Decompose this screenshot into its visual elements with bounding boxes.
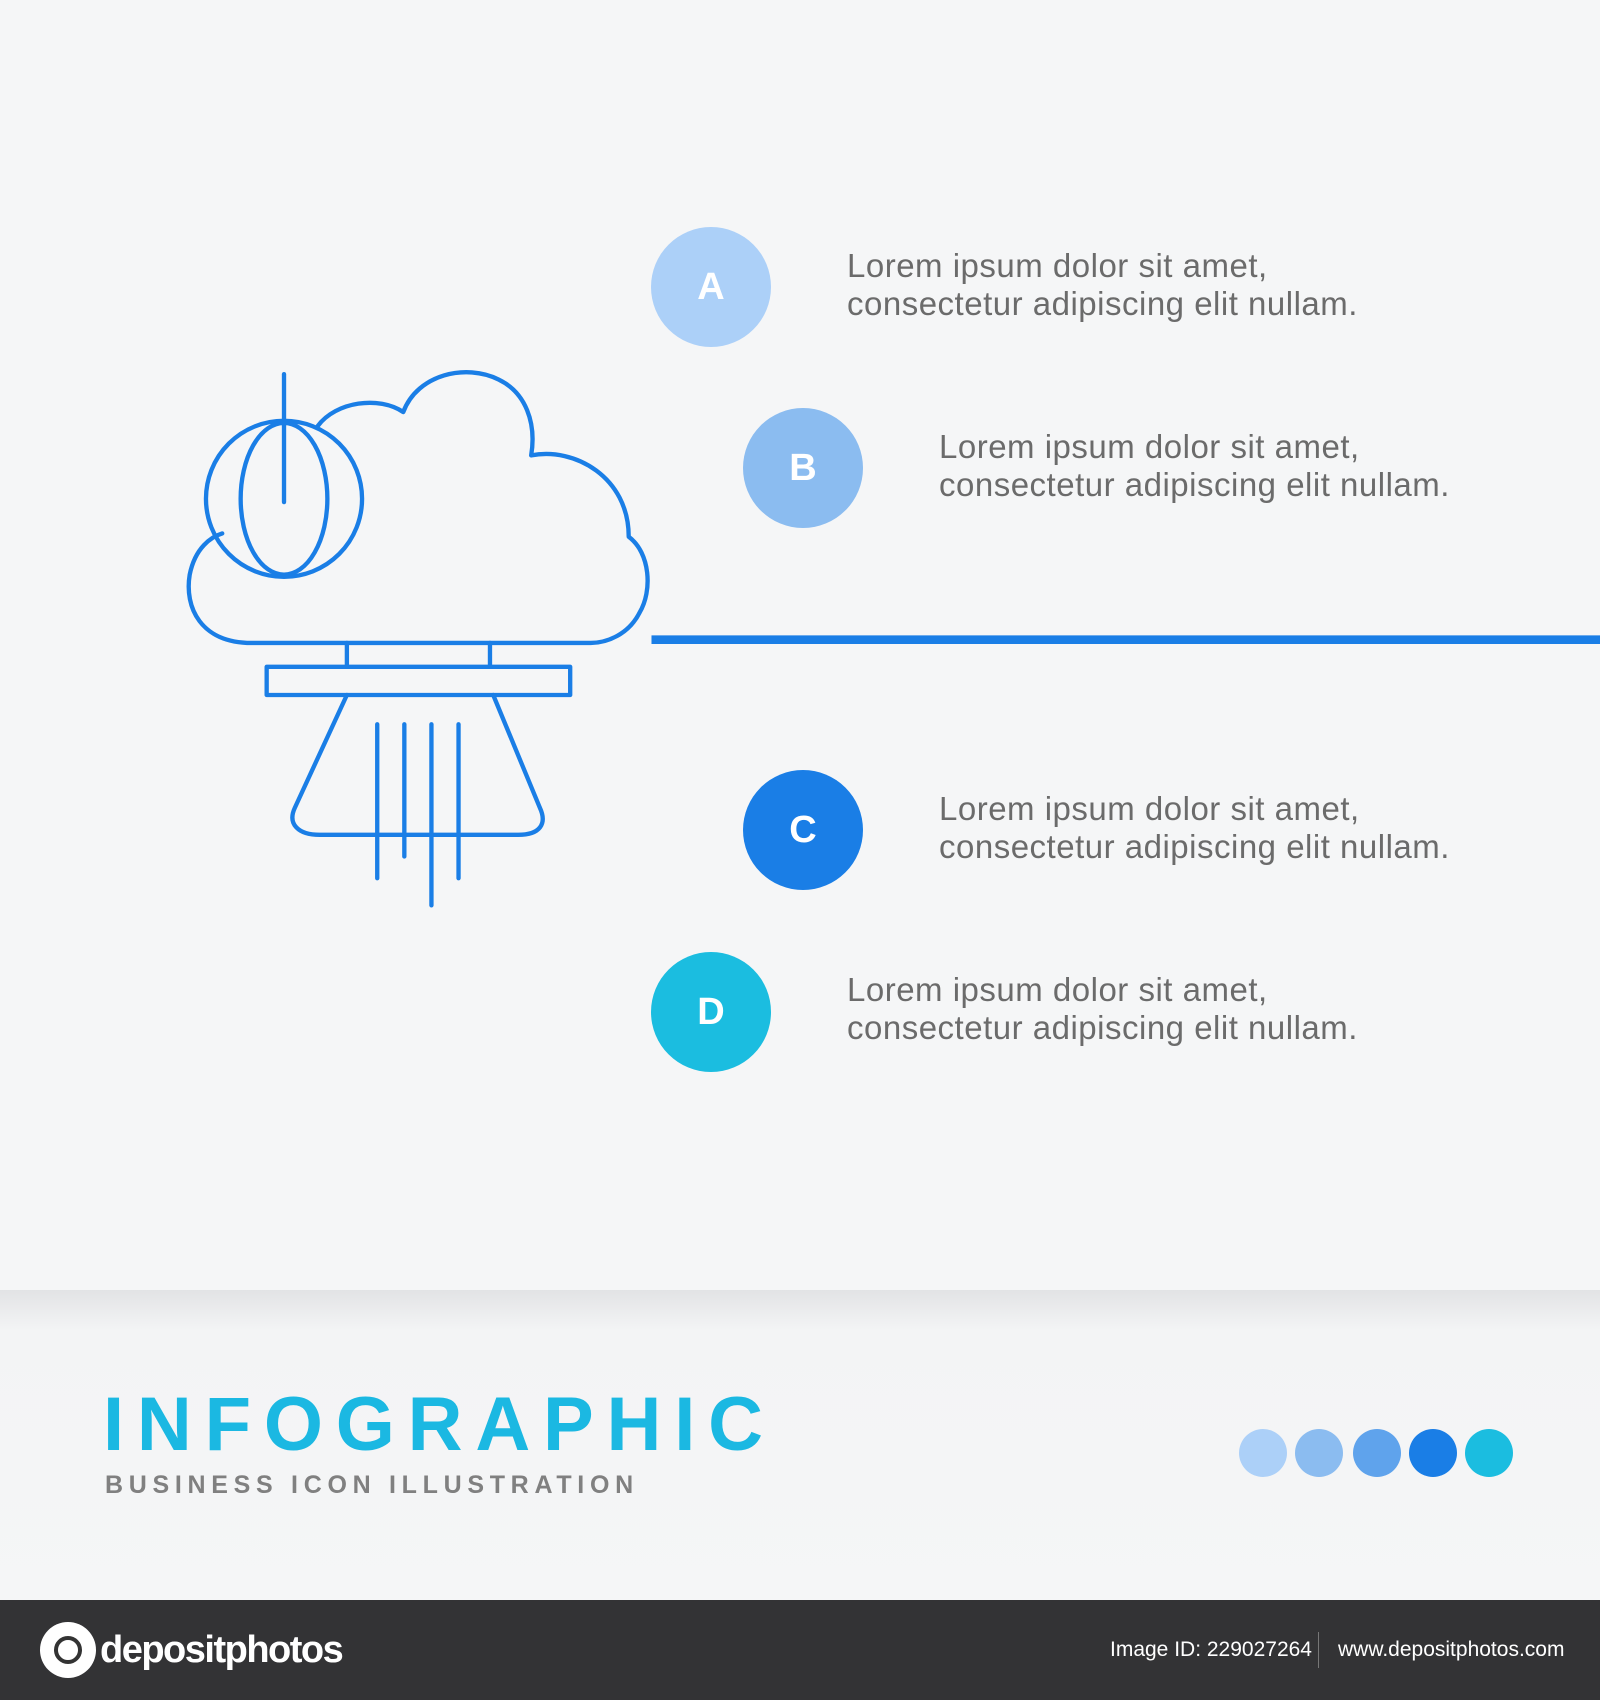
logo [40, 1622, 96, 1678]
connector line [651, 636, 1600, 644]
text C: Lorem ipsum dolor sit amet, [939, 790, 1360, 827]
text A: consectetur adipiscing elit nullam. [847, 285, 1358, 322]
text A [847, 247, 1358, 322]
bottom panel background [0, 1290, 1600, 1600]
text D: Lorem ipsum dolor sit amet, [847, 971, 1268, 1008]
circle A [651, 227, 771, 347]
text C: consectetur adipiscing elit nullam. [939, 828, 1450, 865]
text D: consectetur adipiscing elit nullam. [847, 1009, 1358, 1046]
circle A: A [697, 266, 725, 308]
image id: Image ID: 229027264 [1110, 1638, 1312, 1661]
logo text: depositphotos [100, 1629, 342, 1671]
circle C: C [789, 809, 817, 851]
circle D: D [697, 991, 725, 1033]
url: www.depositphotos.com [1338, 1638, 1564, 1661]
circle B: B [789, 447, 817, 489]
circle B [743, 408, 863, 528]
text B: consectetur adipiscing elit nullam. [939, 466, 1450, 503]
text B [939, 428, 1450, 503]
title: INFOGRAPHIC [103, 1382, 776, 1467]
subtitle: BUSINESS ICON ILLUSTRATION [105, 1471, 639, 1499]
text C [939, 790, 1450, 865]
circle C [743, 770, 863, 890]
text D [847, 971, 1358, 1046]
top panel background [0, 0, 1600, 1290]
dots [1239, 1429, 1513, 1477]
text B: Lorem ipsum dolor sit amet, [939, 428, 1360, 465]
circle D [651, 952, 771, 1072]
icon: nuclear bomb cloud [189, 372, 648, 905]
text A: Lorem ipsum dolor sit amet, [847, 247, 1268, 284]
footer [0, 1600, 1600, 1700]
